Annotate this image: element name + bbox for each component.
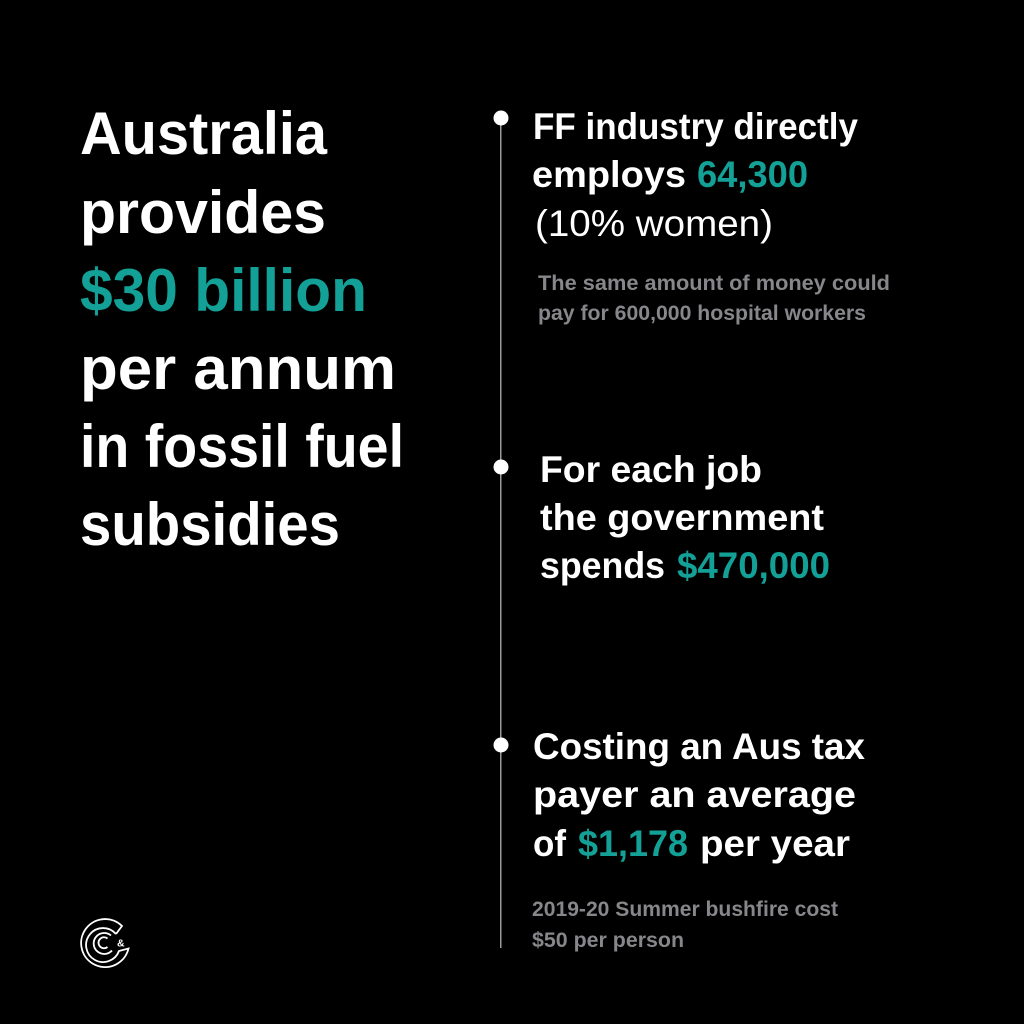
text block: employment: (10% women) — [535, 203, 773, 244]
title — [80, 100, 404, 558]
icon: C& logo — [81, 919, 128, 967]
title: in fossil fuel — [80, 413, 404, 480]
title: subsidies — [80, 491, 340, 558]
note: hospital workers: The same amount of money could — [538, 272, 890, 295]
title: $30 billion — [80, 257, 367, 324]
text block: taxpayer cost: payer an average — [533, 774, 856, 815]
text block: cost per job: the government — [540, 497, 824, 538]
text block: cost per job — [540, 449, 830, 586]
text block: cost per job: $470,000 — [677, 545, 830, 586]
icon: C& logo: & — [117, 938, 125, 950]
title: Australia — [80, 100, 328, 167]
text block: employment: employs — [532, 154, 686, 195]
text block: taxpayer cost: $1,178 — [578, 823, 688, 864]
note: hospital workers: pay for 600,000 hospital workers — [538, 302, 866, 325]
text block: employment: FF industry directly — [533, 106, 858, 147]
note: bushfire cost: 2019-20 Summer bushfire cost — [532, 898, 838, 921]
text block: taxpayer cost — [533, 726, 865, 864]
text block: cost per job: spends — [540, 545, 665, 586]
text block: employment — [532, 106, 858, 244]
text block: taxpayer cost: of — [533, 823, 567, 864]
text block: taxpayer cost: per year — [700, 823, 850, 864]
note: hospital workers — [538, 272, 890, 325]
title: per annum — [80, 335, 396, 402]
timeline line and dots — [494, 110, 508, 948]
text block: employment: 64,300 — [697, 154, 808, 195]
note: bushfire cost: $50 per person — [532, 929, 684, 952]
text block: cost per job: For each job — [540, 449, 762, 490]
note: bushfire cost — [532, 898, 838, 952]
title: provides — [80, 179, 326, 246]
text block: taxpayer cost: Costing an Aus tax — [533, 726, 865, 767]
